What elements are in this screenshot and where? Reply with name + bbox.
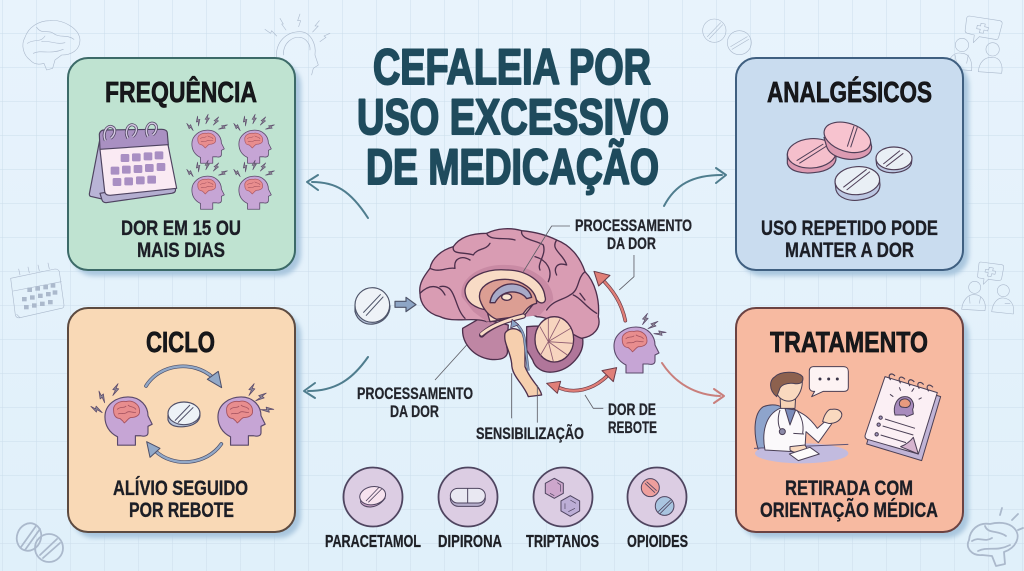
panel: analgésicos [736, 58, 969, 276]
decorative icon: doctor and patient right [962, 262, 1014, 314]
icon: head right [218, 383, 274, 445]
medication: opioides [627, 468, 688, 551]
icon: notebook [865, 374, 941, 461]
label: pain processing left [357, 385, 473, 421]
label: analgésicos [761, 217, 938, 262]
arrow: to ciclo [304, 357, 368, 398]
arrow: to tratamento [662, 363, 724, 403]
label: frequência: DOR EM 15 OU [121, 217, 241, 240]
label: analgésicos: USO REPETIDO PODE [761, 217, 938, 240]
label: ciclo: ALÍVIO SEGUIDO [113, 477, 248, 500]
icon: head top left [185, 114, 228, 163]
arrow: rebound double arrow [547, 368, 617, 393]
decorative icon: doctor and patient top right [947, 16, 1002, 73]
label: frequência: MAIS DIAS [137, 239, 225, 262]
label: ciclo: POR REBOTE [129, 499, 234, 522]
icon: head bottom left [185, 160, 228, 209]
medication: paracetamol [325, 468, 421, 551]
icon: calendar [89, 123, 177, 203]
icon: pills [786, 117, 912, 200]
label: dor de rebote: REBOTE [608, 419, 657, 437]
decorative icon: calendar left [11, 263, 64, 318]
decorative icon: brain bottom right [968, 508, 1023, 566]
panel: frequência [68, 58, 301, 276]
decorative icon: head with rays [265, 14, 330, 75]
arrow: to analgésicos [664, 168, 726, 206]
panel: tratamento [736, 308, 969, 538]
arrow: cycle bottom [147, 442, 221, 462]
title: USO EXCESSIVO [357, 89, 669, 145]
title: DE MEDICAÇÃO [366, 139, 659, 195]
medication row [325, 468, 688, 551]
arrow: to frequência [307, 175, 368, 218]
heading: tratamento: TRATAMENTO [770, 327, 928, 359]
icon: central pill [168, 402, 200, 427]
label: frequência [121, 217, 241, 262]
panel: ciclo [68, 308, 301, 538]
arrow: cycle top [146, 366, 222, 388]
label: sensibilização: SENSIBILIZAÇÃO [476, 423, 584, 443]
title [357, 39, 669, 195]
icon: brain anatomy [420, 229, 599, 397]
label: tratamento [760, 477, 938, 522]
medication: triptanos: TRIPTANOS [526, 531, 599, 551]
label: pain processing left: PROCESSAMENTO [357, 385, 473, 403]
label: dor de rebote: DOR DE [608, 401, 656, 419]
label: analgésicos: MANTER A DOR [785, 239, 914, 262]
label: pain processing top: DA DOR [607, 235, 656, 253]
central brain diagram [355, 217, 692, 443]
label: pain processing top [575, 217, 692, 253]
label: dor de rebote [608, 401, 657, 437]
heading: frequência: FREQUÊNCIA [105, 75, 257, 109]
label: tratamento: ORIENTAÇÃO MÉDICA [760, 499, 938, 522]
heading: analgésicos: ANALGÉSICOS [767, 75, 932, 109]
medication: opioides: OPIOIDES [627, 531, 688, 551]
icon: head left [90, 383, 152, 445]
medication: dipirona [438, 468, 502, 551]
icon: doctor [754, 372, 848, 463]
medication: triptanos [526, 468, 599, 551]
icon: head bottom right [232, 160, 275, 209]
medication: paracetamol: PARACETAMOL [325, 531, 421, 551]
label: pain processing left: DA DOR [390, 403, 439, 421]
decorative icon: pills bottom left [13, 520, 63, 562]
label: pain processing top: PROCESSAMENTO [575, 217, 692, 235]
leader lines [435, 226, 634, 423]
label: tratamento: RETIRADA COM [785, 477, 913, 500]
heading: ciclo: CICLO [146, 327, 215, 359]
icon: speech bubble [809, 367, 848, 397]
arrow: up to brain [594, 271, 625, 321]
medication: dipirona: DIPIRONA [438, 531, 502, 551]
decorative icon: brain top left [23, 21, 80, 70]
label: ciclo [113, 477, 248, 522]
decorative icon: pills top right [703, 19, 751, 55]
title: CEFALEIA POR [373, 39, 651, 95]
icon: head top right [232, 114, 275, 163]
icon: head with pain [614, 313, 667, 373]
icon: pill entering brain [355, 288, 416, 324]
